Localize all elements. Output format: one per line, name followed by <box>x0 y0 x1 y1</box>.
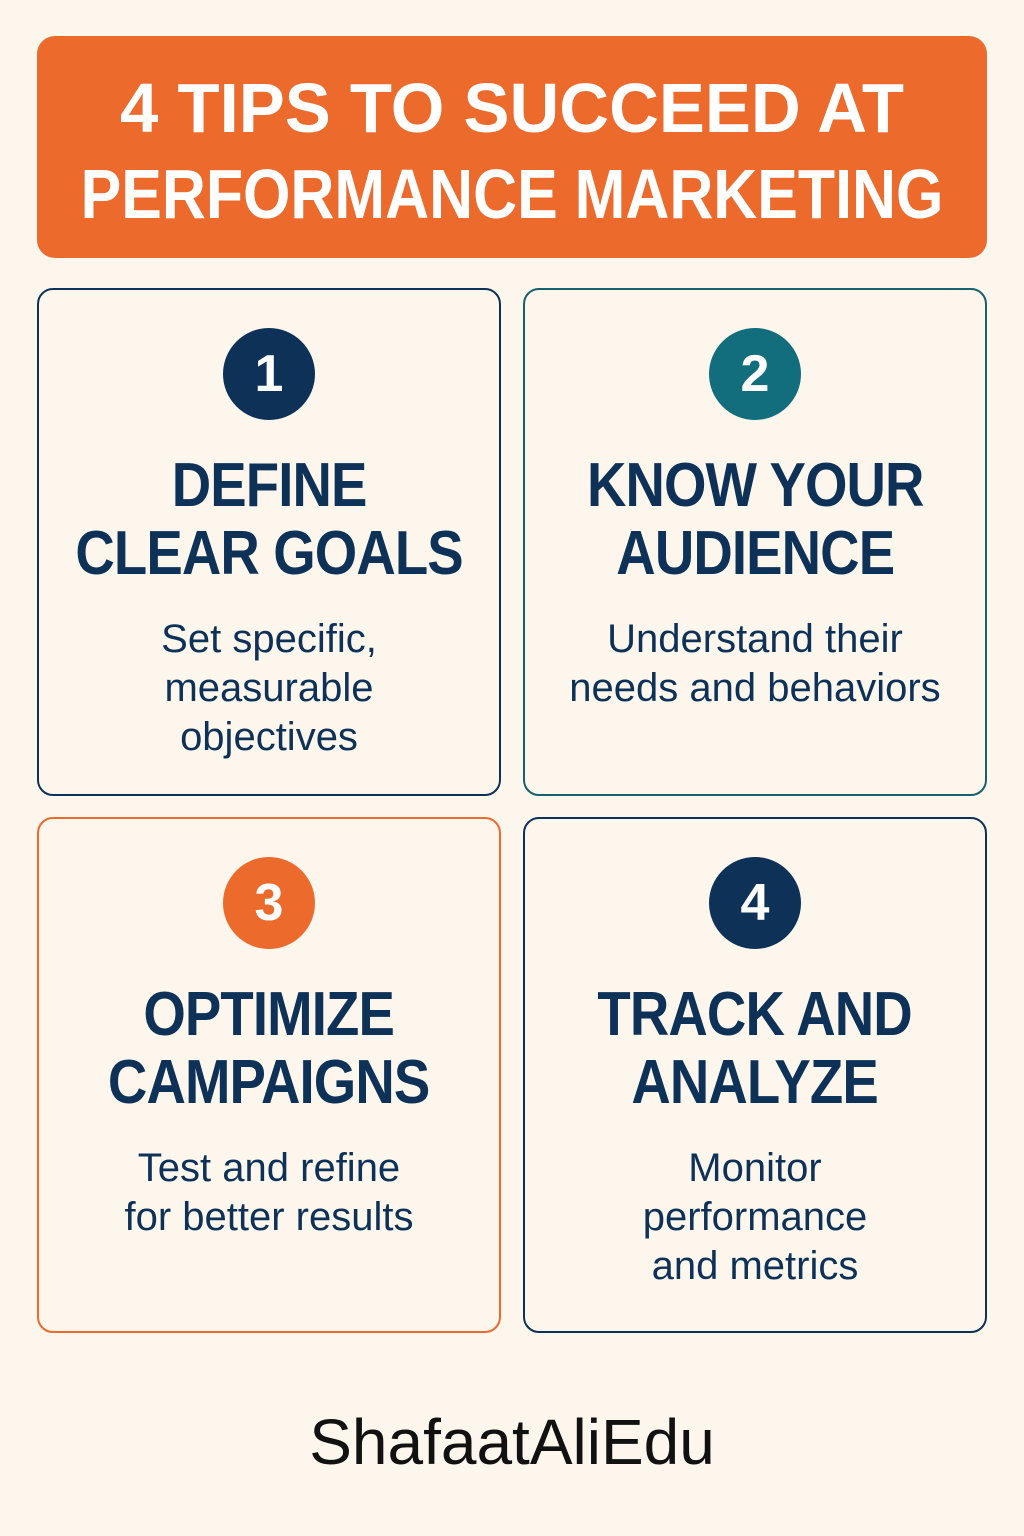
title line 2: PERFORMANCE MARKETING <box>81 155 943 233</box>
text: tip 3: Test and refine <box>138 1146 400 1190</box>
heading: define clear goals: CLEAR GOALS <box>75 519 463 588</box>
heading: track and analyze <box>598 980 912 1117</box>
heading: track and analyze: ANALYZE <box>632 1048 878 1117</box>
heading: define clear goals: DEFINE <box>172 451 366 520</box>
title line 1: 4 TIPS TO SUCCEED AT <box>120 69 904 147</box>
text: tip 3 <box>124 1146 414 1239</box>
heading: know your audience: AUDIENCE <box>616 519 894 588</box>
heading: optimize campaigns: OPTIMIZE <box>144 980 394 1049</box>
heading: know your audience: KNOW YOUR <box>587 451 923 520</box>
text: tip 2: Understand their <box>607 617 903 661</box>
panel: tip 4 <box>523 817 987 1333</box>
text: tip 2 <box>569 617 941 710</box>
title <box>37 36 987 258</box>
text: tip 1: objectives <box>180 715 358 759</box>
icon: number 3 <box>223 857 315 949</box>
icon: number 2 <box>709 328 801 420</box>
text: tip 4 <box>643 1146 867 1288</box>
icon: number 2: 2 <box>741 345 769 403</box>
icon: number 3: 3 <box>255 874 283 932</box>
icon: number 1 <box>223 328 315 420</box>
text: tip 1: measurable <box>164 666 374 710</box>
icon: number 4: 4 <box>741 874 769 932</box>
text: tip 4: Monitor <box>688 1146 822 1190</box>
text: tip 4: performance <box>643 1195 867 1239</box>
icon: number 4 <box>709 857 801 949</box>
icon: number 1: 1 <box>255 345 283 403</box>
heading: track and analyze: TRACK AND <box>598 980 912 1049</box>
panel: tip 2 <box>523 288 987 796</box>
text: tip 1: Set specific, <box>161 617 377 661</box>
text: tip 2: needs and behaviors <box>569 666 941 710</box>
text: tip 1 <box>161 617 377 759</box>
heading: optimize campaigns: CAMPAIGNS <box>108 1048 430 1117</box>
heading: define clear goals <box>75 451 463 588</box>
panel: tip 1 <box>37 288 501 796</box>
text: tip 4: and metrics <box>652 1244 858 1288</box>
heading: optimize campaigns <box>108 980 430 1117</box>
heading: know your audience <box>587 451 924 588</box>
panel: tip 3 <box>37 817 501 1333</box>
brand footer: ShafaatAliEdu <box>309 1406 715 1478</box>
text: tip 3: for better results <box>124 1195 414 1239</box>
